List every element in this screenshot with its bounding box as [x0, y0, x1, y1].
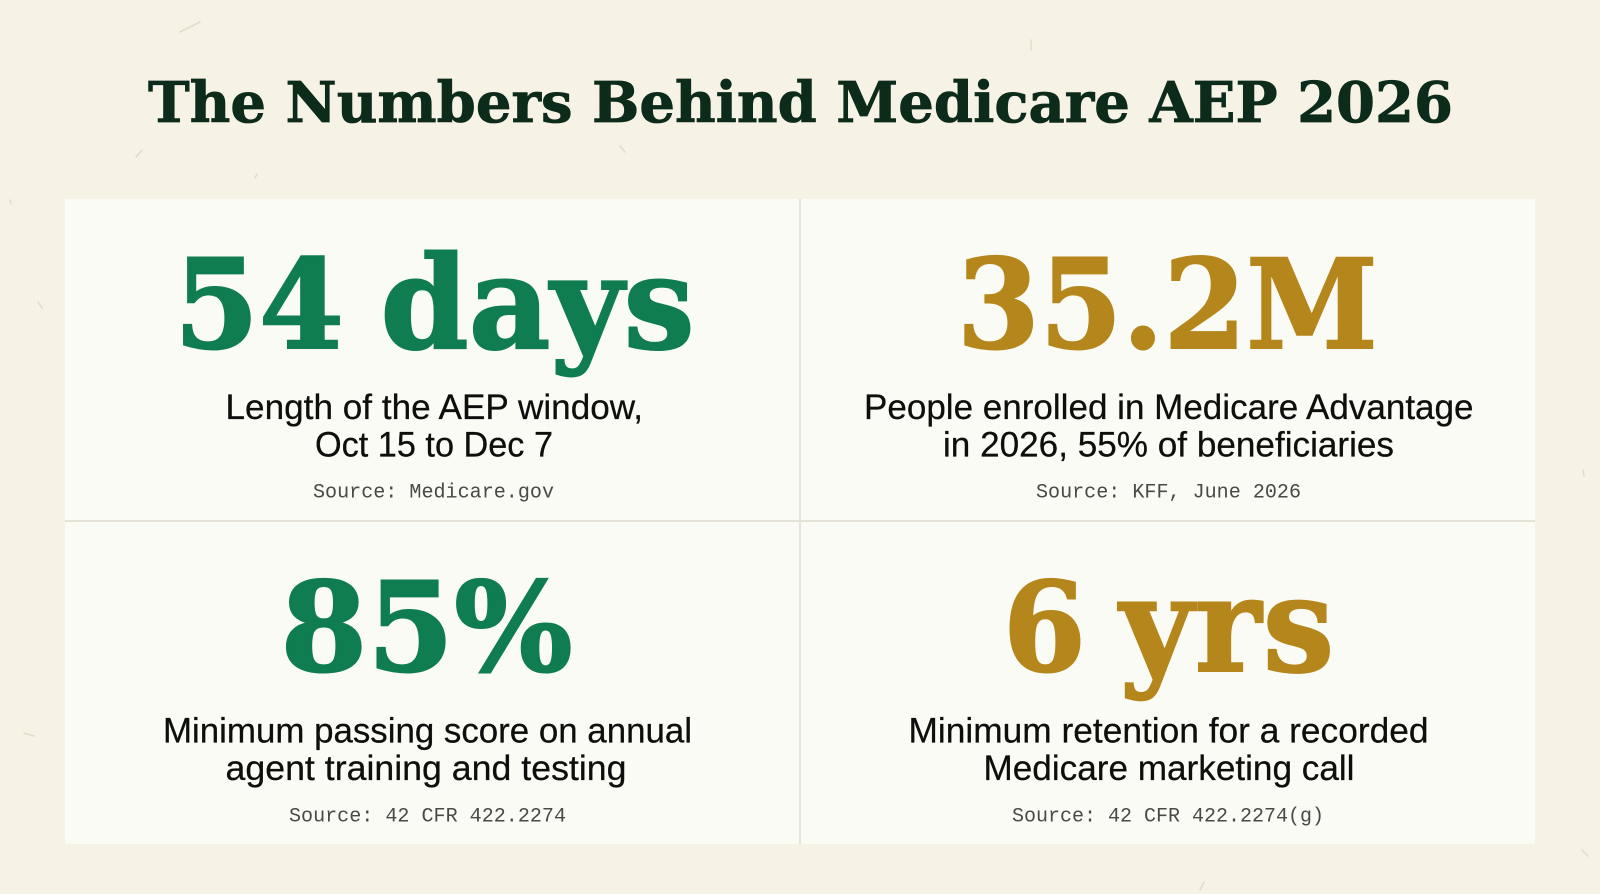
big number: 6 yrs: 6 yrs	[1003, 548, 1336, 703]
source: KFF: Source: KFF, June 2026	[1036, 482, 1301, 504]
description: AEP window: Oct 15 to Dec 7	[315, 426, 553, 464]
big number: 54 days: 54 days	[174, 228, 695, 378]
description: AEP window: Length of the AEP window,	[226, 388, 643, 427]
description: passing score: agent training and testing	[226, 749, 626, 788]
panel: passing score	[163, 555, 692, 828]
description: passing score: Minimum passing score on annual	[163, 712, 692, 750]
panel: call retention	[908, 548, 1428, 828]
source: 42 CFR 422.2274(g): Source: 42 CFR 422.2274(g)	[1012, 806, 1324, 828]
description: call retention: Medicare marketing call	[984, 749, 1354, 788]
description: AEP window	[226, 388, 643, 464]
source: Medicare.gov: Source: Medicare.gov	[313, 482, 554, 504]
description: enrollment: People enrolled in Medicare Advantage	[864, 388, 1474, 427]
panel: AEP window length	[174, 228, 695, 504]
big number: 85%: 85%	[280, 555, 573, 701]
description: enrollment: in 2026, 55% of beneficiaries	[943, 426, 1394, 464]
panel: Medicare Advantage enrollment	[864, 232, 1474, 504]
big number: 35.2M: 35.2M	[957, 232, 1378, 378]
description: call retention: Minimum retention for a recorded	[908, 712, 1428, 750]
source: 42 CFR 422.2274: Source: 42 CFR 422.2274	[289, 806, 566, 828]
stat grid	[65, 199, 1535, 844]
description: enrollment	[864, 388, 1474, 464]
description: call retention	[908, 712, 1428, 788]
title: The Numbers Behind Medicare AEP 2026	[148, 70, 1453, 136]
description: passing score	[163, 712, 692, 788]
